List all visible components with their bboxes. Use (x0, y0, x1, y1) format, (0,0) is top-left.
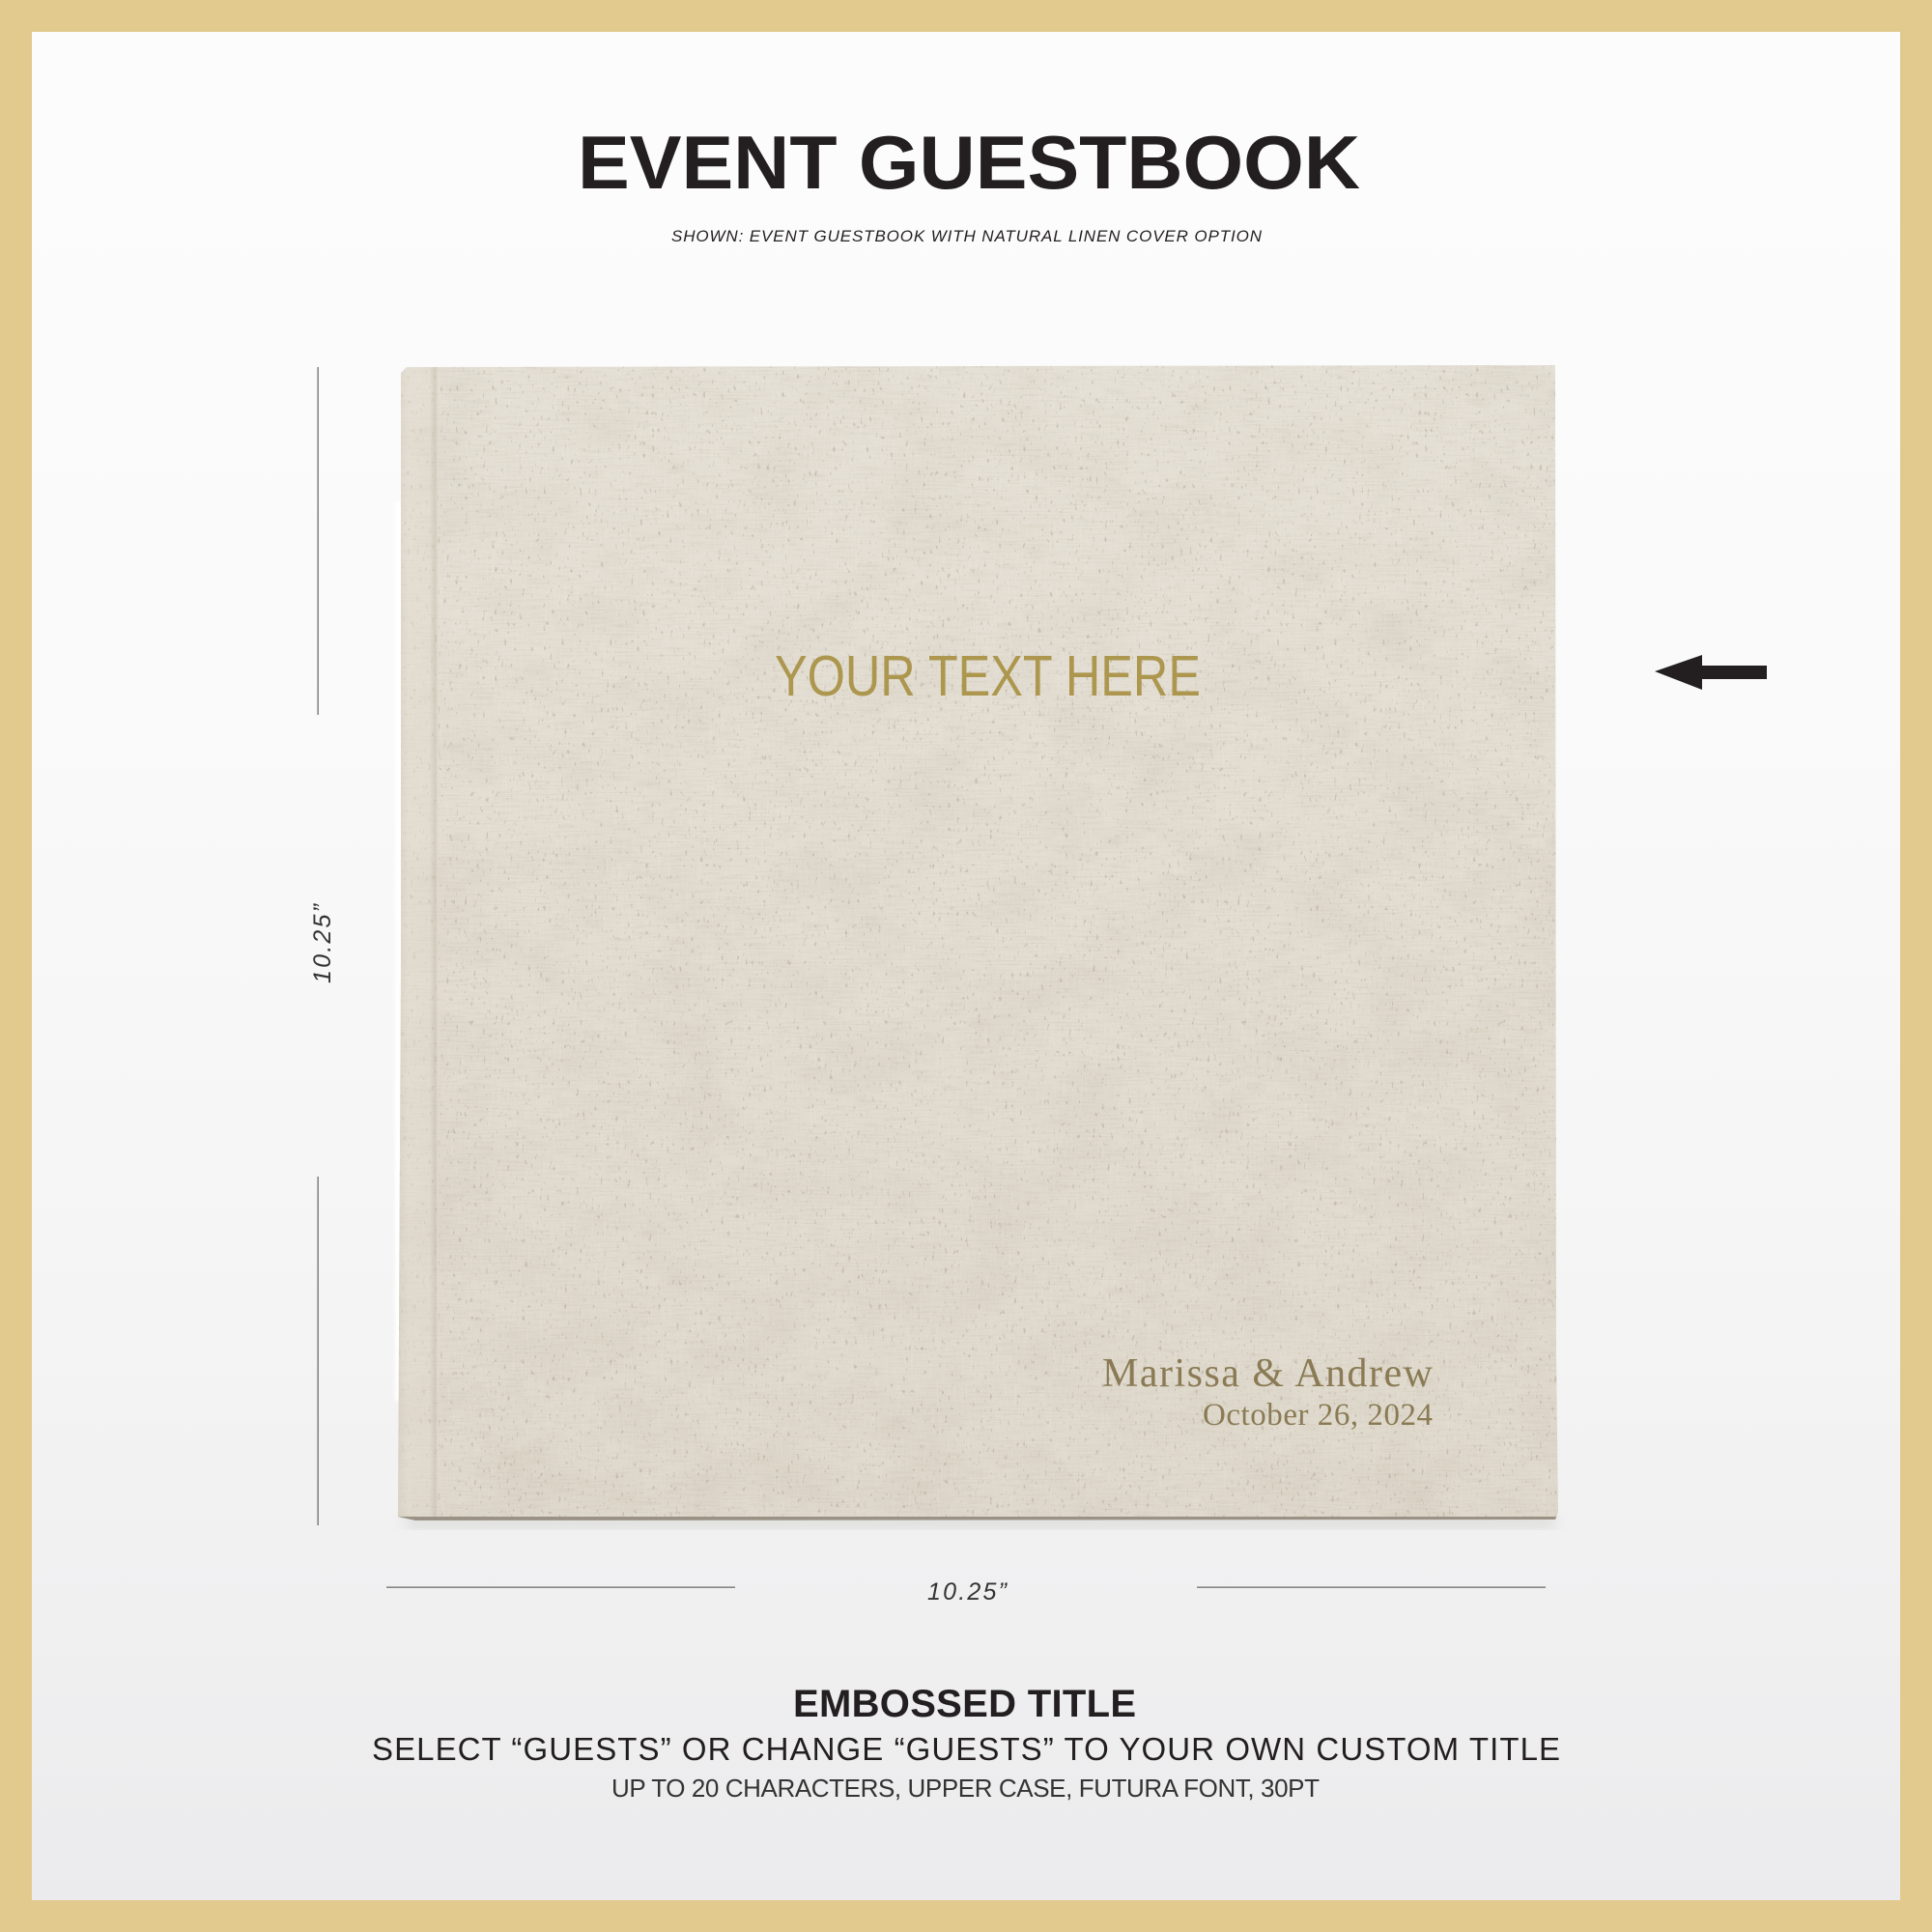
date text: October 26, 2024 (1203, 1398, 1433, 1433)
book shadow (406, 1519, 1555, 1526)
embossed title caption (372, 1683, 1560, 1803)
width label: 10.25” (927, 1578, 1009, 1605)
spine hinge (398, 362, 439, 1526)
arrow (1655, 655, 1767, 690)
embossed gold title text: YOUR TEXT HERE (775, 644, 1201, 708)
names text: Marissa & Andrew (1102, 1351, 1434, 1396)
width line left (386, 1586, 735, 1588)
book (391, 357, 1565, 1526)
linen warp threads (391, 357, 1565, 1526)
caption heading: EMBOSSED TITLE (793, 1683, 1136, 1725)
page edge (395, 502, 402, 1401)
height line lower (317, 1177, 319, 1525)
linen flecks (391, 357, 1565, 1526)
linen mottling (391, 357, 1565, 1526)
title: EVENT GUESTBOOK (578, 120, 1360, 205)
width line right (1197, 1586, 1546, 1588)
subtitle: SHOWN: EVENT GUESTBOOK WITH NATURAL LINEN COVER OPTION (671, 227, 1263, 245)
height label: 10.25” (309, 902, 336, 983)
caption note: UP TO 20 CHARACTERS, UPPER CASE, FUTURA FONT, 30PT (611, 1774, 1320, 1803)
linen weft threads (391, 357, 1565, 1526)
height line upper (317, 367, 319, 715)
bottom board edge (398, 1517, 1559, 1520)
caption line: SELECT “GUESTS” OR CHANGE “GUESTS” TO YOUR OWN CUSTOM TITLE (372, 1731, 1560, 1767)
linen cover (391, 357, 1565, 1526)
